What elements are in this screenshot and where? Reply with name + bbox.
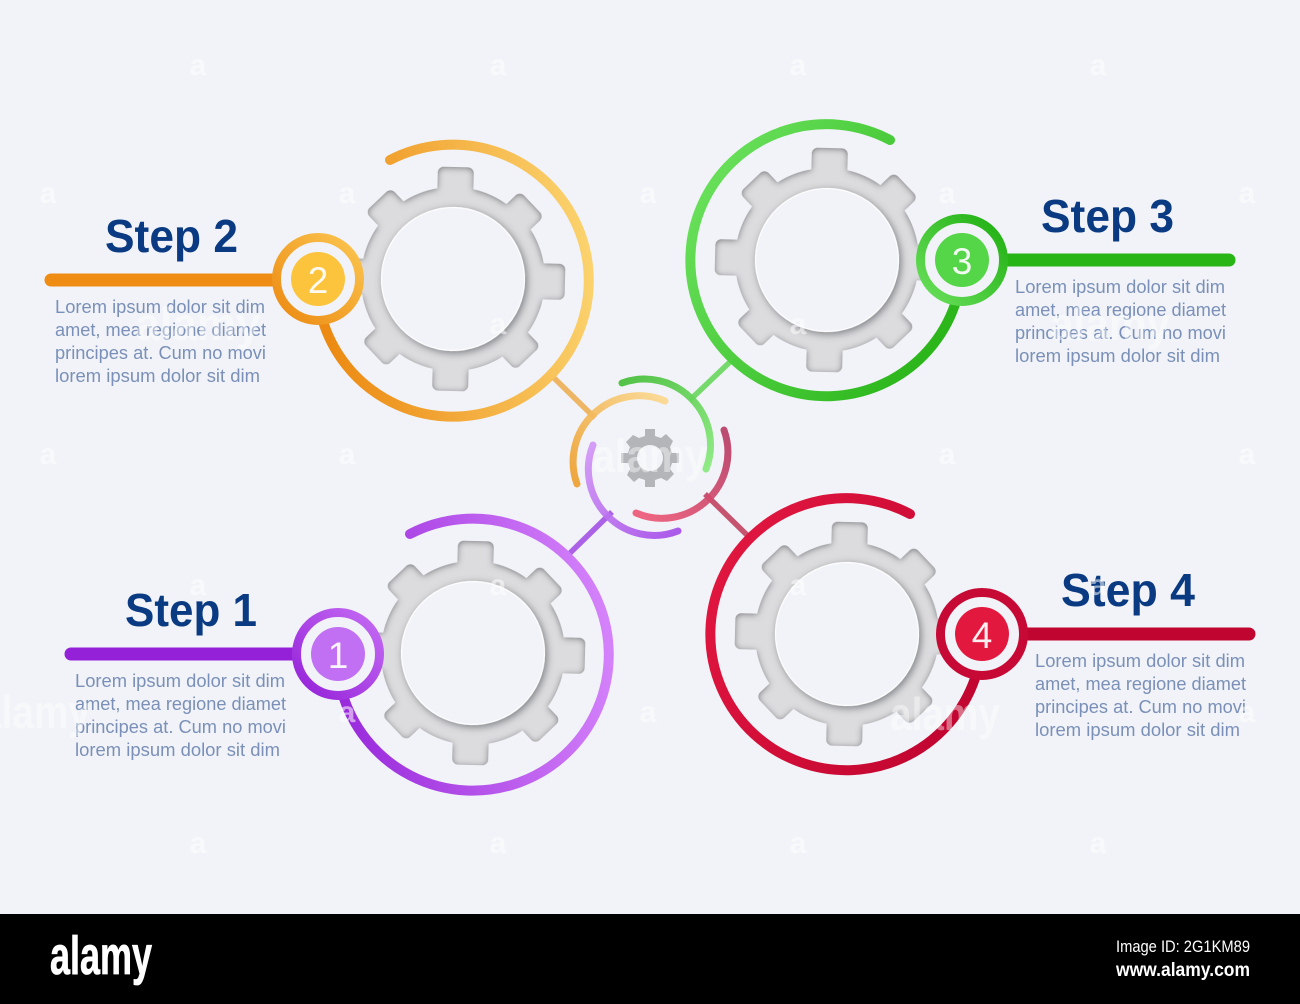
image id: Image ID: 2G1KM89 [1116,937,1250,956]
heading: step 3: Step 3 [1041,190,1174,242]
text block: step 4 [1035,650,1246,740]
text block: step 2 [55,296,266,386]
text block: step 4: Lorem ipsum dolor sit dim [1035,650,1245,671]
footer bar [0,914,1300,1004]
watermark overlay: a [339,177,356,210]
gear 1 [358,538,588,768]
text block: step 4: lorem ipsum dolor sit dim [1035,719,1240,740]
text block: step 1: lorem ipsum dolor sit dim [75,739,280,760]
watermark overlay: a [1090,569,1107,602]
text block: step 1: principes at. Cum no movi [75,716,286,737]
text block: step 3 [1015,276,1226,366]
watermark overlay: a [40,177,57,210]
watermark overlay: alamy [136,298,261,350]
badge 4 [940,592,1024,676]
heading: step 2: Step 2 [105,210,238,262]
gear 4 [732,519,962,749]
watermark overlay: a [790,49,807,82]
heading: step 4: Step 4 [1061,564,1195,616]
text block: step 3: lorem ipsum dolor sit dim [1015,345,1220,366]
text block: step 3: principes at. Cum no movi [1015,322,1226,343]
text block: step 4: principes at. Cum no movi [1035,696,1246,717]
text block: step 4: amet, mea regione diamet [1035,673,1246,694]
gear 2 [338,164,568,394]
watermark overlay: a [490,308,507,341]
icon: central gear [621,429,679,487]
watermark overlay [0,49,1256,860]
badge 4: 4 [972,615,992,656]
watermark overlay: a [490,827,507,860]
watermark overlay: alamy [1050,298,1170,350]
watermark overlay: a [790,569,807,602]
hub arcs [573,379,728,535]
line 4 [1020,628,1249,640]
text block: step 3: amet, mea regione diamet [1015,299,1226,320]
watermark overlay: a [1090,827,1107,860]
watermark overlay: a [40,438,57,471]
watermark overlay: a [339,696,356,729]
watermark overlay: a [1239,177,1256,210]
connector lines between hub and steps [553,360,748,553]
panel: step 1 [71,519,609,791]
watermark overlay: a [790,308,807,341]
watermark overlay: a [1090,49,1107,82]
watermark overlay: a [190,827,207,860]
heading: step 1: Step 1 [125,584,257,636]
line 1 [71,648,300,660]
badge 3 [920,218,1004,302]
watermark overlay: a [640,177,657,210]
panel: step 3 [690,124,1229,396]
watermark overlay: a [190,49,207,82]
ring 1 [342,519,609,791]
gear 3 [712,145,942,375]
text block: step 1: Lorem ipsum dolor sit dim [75,670,285,691]
watermark overlay: alamy [890,688,1000,740]
watermark overlay: alamy [592,430,708,482]
badge 2: 2 [308,260,328,301]
text block: step 1 [75,670,286,760]
ring 4 [710,498,977,770]
panel: step 4 [710,498,1249,770]
text block: step 2: principes at. Cum no movi [55,342,266,363]
line 3 [1000,254,1229,266]
ring 3 [690,124,957,396]
badge 1 [296,612,380,696]
panel: step 2 [51,145,589,417]
watermark overlay: a [640,696,657,729]
panel: central hub [573,379,728,535]
watermark overlay: a [939,177,956,210]
watermark overlay: a [1239,696,1256,729]
line 2 [51,274,280,286]
text block: step 2: amet, mea regione diamet [55,319,266,340]
text block: step 3: Lorem ipsum dolor sit dim [1015,276,1225,297]
watermark overlay: a [939,438,956,471]
badge 1: 1 [328,635,348,676]
badge 3: 3 [952,241,972,282]
ring 2 [322,145,589,417]
text block: step 1: amet, mea regione diamet [75,693,286,714]
watermark overlay: a [490,569,507,602]
watermark overlay: a [490,49,507,82]
site url: www.alamy.com [1115,960,1250,981]
watermark overlay: a [1239,438,1256,471]
watermark overlay: a [790,827,807,860]
badge 2 [276,238,360,320]
footer logo: alamy [50,926,152,986]
text block: step 2: Lorem ipsum dolor sit dim [55,296,265,317]
watermark overlay: a [190,569,207,602]
watermark overlay: a [339,438,356,471]
text block: step 2: lorem ipsum dolor sit dim [55,365,260,386]
